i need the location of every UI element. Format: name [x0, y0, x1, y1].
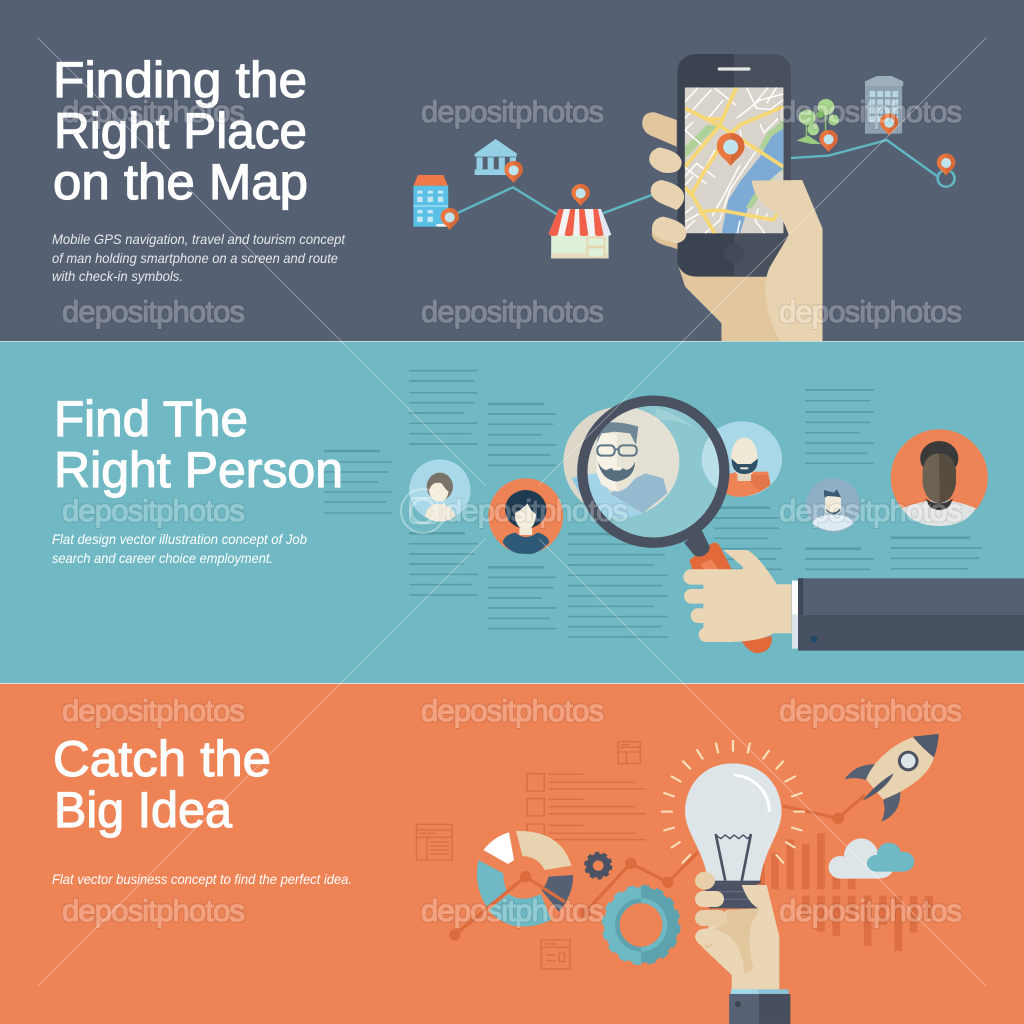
icon: blue building	[413, 175, 448, 227]
back finger and finger shadow	[642, 112, 685, 249]
illustration: hand with lightbulb and business icons	[416, 734, 939, 1024]
watermark: depositphotos: depositphotos	[779, 294, 962, 329]
avatar: glasses man	[563, 407, 679, 518]
watermark: depositphotos: depositphotos	[421, 294, 604, 329]
text lines: left column	[324, 451, 392, 513]
watermark: depositphotos: depositphotos	[421, 94, 604, 129]
watermark: depositphotos: depositphotos	[779, 493, 962, 528]
suit sleeve	[792, 578, 1024, 651]
title: Catch the Big Idea: Big Idea	[54, 782, 232, 838]
description: map: Mobile GPS navigation, travel and tourism concept	[52, 231, 346, 247]
icon: small gear	[586, 854, 610, 877]
illustration: candidates with magnifier	[409, 371, 1024, 653]
hand palm shadow	[679, 257, 783, 342]
title: Find The Right Person: Find The	[54, 391, 248, 447]
title: Find The Right Person: Right Person	[54, 442, 343, 498]
description: map: with check-in symbols.	[52, 268, 183, 284]
watermark: depositphotos: depositphotos	[779, 94, 962, 129]
magnifier, glasses man and hand	[563, 401, 792, 653]
icon: rocket	[845, 734, 939, 822]
description: person: search and career choice employment.	[52, 550, 273, 566]
illustration: hand holding phone with route	[413, 54, 955, 342]
description: person: Flat design vector illustration concept of Job	[52, 531, 307, 547]
hand holding bulb	[695, 872, 779, 990]
avatar: woman light blue	[409, 459, 470, 522]
icon: trees	[796, 99, 839, 144]
icon: shop	[548, 209, 611, 258]
title: Finding the Right Place on the Map: Finding the	[53, 52, 307, 108]
resume text lines	[409, 371, 982, 637]
watermark: depositphotos: depositphotos	[779, 693, 962, 728]
watermark: depositphotos: depositphotos	[62, 94, 245, 129]
map centre pin	[717, 133, 744, 166]
icon: light rays	[661, 740, 805, 863]
watermark: depositphotos: depositphotos	[62, 294, 245, 329]
magnifier lens	[582, 401, 724, 543]
map screen	[685, 87, 783, 234]
title: Catch the Big Idea: Catch the	[53, 731, 271, 787]
watermark: depositphotos: depositphotos	[421, 693, 604, 728]
title: Finding the Right Place on the Map	[53, 52, 308, 210]
hand and thumb	[752, 180, 823, 342]
faint bar chart	[758, 833, 933, 951]
faint window icons	[416, 742, 640, 969]
avatar: dark-skinned man	[891, 429, 988, 526]
hand holding magnifier	[683, 550, 792, 642]
icon: grey office building	[865, 76, 903, 134]
watermark: depositphotos	[62, 94, 962, 928]
faint checklist	[527, 774, 646, 840]
smartphone	[677, 54, 791, 277]
watermark: depositphotos: depositphotos	[62, 693, 245, 728]
front fingers	[649, 147, 687, 243]
trend line	[449, 795, 865, 941]
panel: find the person	[0, 341, 1024, 683]
icon: bank	[475, 139, 517, 175]
avatar: small man	[806, 478, 860, 533]
donut chart	[477, 831, 573, 926]
watermark: depositphotos: depositphotos	[779, 893, 962, 928]
description: idea: Flat vector business concept to find the perfect idea.	[52, 871, 352, 887]
icon: large gear	[606, 889, 676, 961]
icon: lightbulb	[685, 763, 782, 882]
watermark: camera logo	[401, 489, 445, 533]
avatar: bald bearded man	[702, 421, 782, 497]
panel: big idea	[0, 683, 1024, 1024]
route line	[450, 140, 955, 217]
magnifier handle	[684, 530, 772, 653]
avatar: woman orange	[488, 478, 563, 554]
description: person	[52, 531, 307, 566]
route pins	[441, 113, 955, 230]
bulb base	[705, 881, 761, 908]
title: Finding the Right Place on the Map: on the Map	[53, 154, 308, 210]
icon: clouds	[829, 838, 914, 879]
title: Finding the Right Place on the Map: Right Place	[54, 103, 307, 159]
description: map: of man holding smartphone on a screen and route	[52, 250, 338, 266]
title: Find The Right Person	[54, 391, 343, 498]
watermark: depositphotos: depositphotos	[62, 893, 245, 928]
watermark: depositphotos: depositphotos	[421, 893, 604, 928]
description: map	[52, 231, 346, 284]
watermark: depositphotos: depositphotos	[62, 493, 245, 528]
shirt cuff and sleeve	[729, 989, 790, 1024]
panel: map navigation	[0, 0, 1024, 342]
watermark: depositphotos: depositphotos	[445, 493, 628, 528]
title: Catch the Big Idea	[53, 731, 271, 838]
